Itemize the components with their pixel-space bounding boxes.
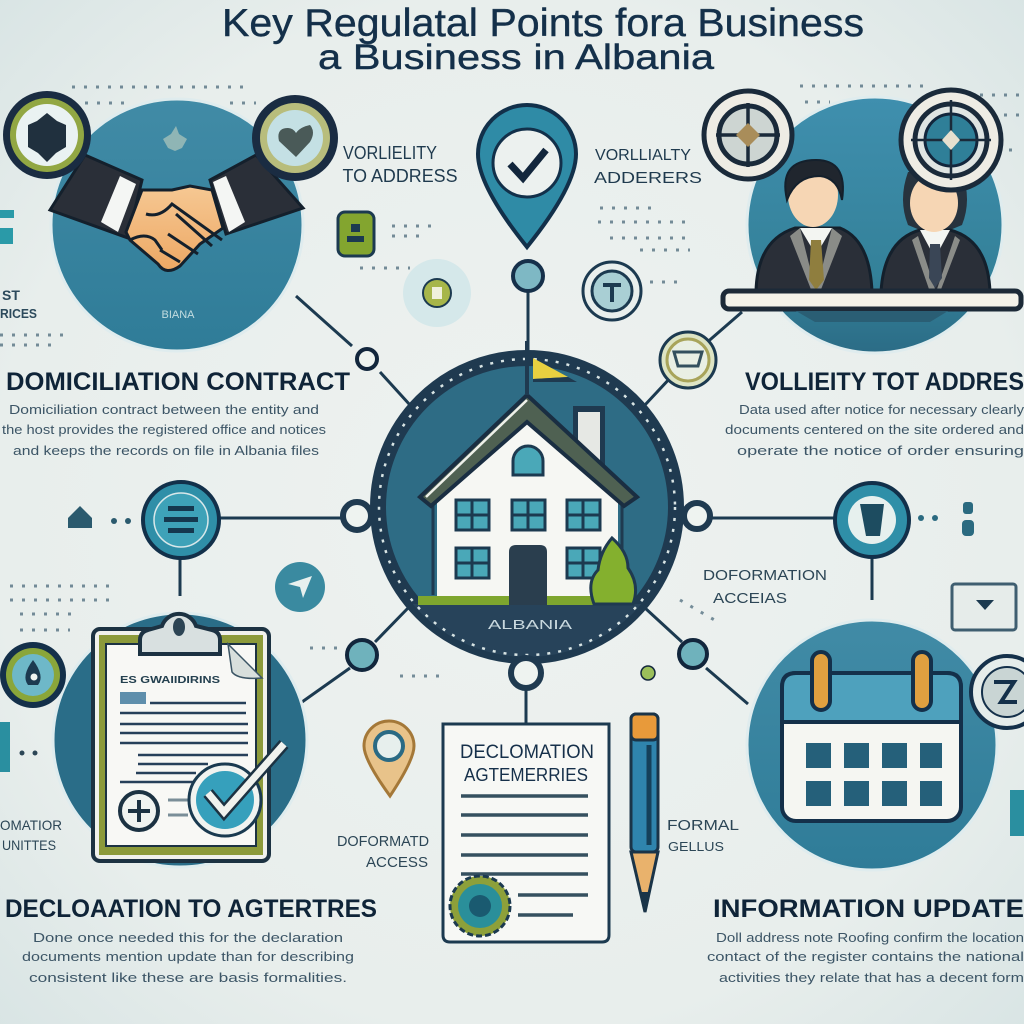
icon: pen	[631, 714, 658, 912]
label: deformated access: DOFORMATD	[337, 833, 429, 850]
heading: declaration to agreements: DECLOAATION TO AGTERTRES	[5, 895, 377, 923]
title: Key Regulatal Points fora Business	[222, 2, 864, 45]
central illustration: house in albania: ALBANIA	[488, 617, 572, 632]
caption: BIANA	[161, 309, 195, 321]
teal circle backdrop	[51, 99, 303, 351]
text: domiciliation description	[2, 402, 327, 458]
clipboard	[93, 614, 284, 861]
icon: T badge	[583, 262, 641, 320]
label: formal details	[667, 817, 739, 854]
text: declaration description: consistent like these are basis formalities.	[29, 970, 347, 985]
icon: left edge drop badge	[0, 642, 66, 708]
label: validity address right	[594, 147, 702, 187]
clipboard: ES GWAIIDIRINS	[120, 675, 220, 686]
lower band	[413, 604, 641, 656]
label: validity to address left: TO ADDRESS	[342, 166, 458, 186]
icon: document badge right	[835, 483, 909, 557]
nodes on central circle	[343, 349, 710, 688]
ground	[418, 596, 618, 605]
central illustration: house in albania	[370, 341, 690, 664]
icon: small figures right	[918, 502, 974, 536]
podium	[723, 291, 1021, 309]
icon: small nav badge	[275, 562, 325, 612]
plus badge	[120, 792, 158, 830]
label: formal details: FORMAL	[667, 817, 739, 834]
document: declaration agreements: DECLOMATION	[460, 742, 594, 763]
badge: refresh	[971, 656, 1024, 728]
text: information description: contact of the register contains the national	[707, 949, 1024, 964]
label: deformation access	[703, 567, 827, 607]
label: deformated access: ACCESS	[366, 854, 428, 871]
panel: information update illustration	[747, 620, 1024, 870]
icon: small figures left	[68, 506, 131, 528]
panel: validity of address illustration	[704, 90, 1021, 353]
woman	[881, 172, 990, 292]
badge: globe	[3, 91, 91, 179]
label: validity address right: ADDERERS	[594, 170, 702, 187]
text: information description: Doll address note Roofing confirm the location	[716, 930, 1024, 945]
check badge	[189, 764, 261, 836]
label: left edge: OMATIOR	[0, 817, 62, 833]
panel: domiciliation contract illustration	[3, 91, 338, 351]
document: declaration agreements: AGTEMERRIES	[464, 765, 588, 785]
seal	[450, 876, 510, 936]
icon: map pin bottom	[364, 721, 414, 796]
text: information description	[707, 930, 1024, 985]
node: under pin	[513, 261, 543, 291]
side tab	[1010, 790, 1024, 836]
icon: left edge list labels: ST	[2, 287, 20, 303]
text: validity description: operate the notice of order ensuring	[737, 443, 1024, 458]
document: declaration agreements	[443, 724, 609, 942]
icon: left edge list labels	[0, 210, 37, 321]
text: validity description: documents centered on the site ordered and	[725, 422, 1024, 437]
label: deformation access: DOFORMATION	[703, 567, 827, 584]
top window	[513, 446, 543, 475]
panel: declaration illustration	[53, 613, 307, 867]
title	[222, 2, 864, 77]
label: deformated access	[337, 833, 429, 871]
icon: location pin with check	[478, 105, 576, 247]
label: validity to address left	[342, 143, 458, 186]
decorative dot clusters	[0, 86, 1020, 676]
door	[509, 545, 547, 605]
house	[418, 341, 637, 605]
icon: list badge left	[143, 482, 219, 558]
windows	[456, 500, 600, 578]
handshake icon	[50, 155, 303, 271]
icon: green small badge	[338, 212, 374, 256]
text: domiciliation description: Domiciliation contract between the entity and	[9, 402, 319, 417]
text: domiciliation description: the host provides the registered office and notices	[2, 422, 327, 437]
target badge right	[901, 90, 1001, 190]
label: deformation access: ACCEIAS	[713, 590, 787, 607]
label: formal details: GELLUS	[668, 839, 724, 854]
badge: heart	[252, 95, 338, 181]
text: information description: activities they relate that has a decent form	[719, 970, 1024, 985]
heading: information update: INFORMATION UPDATE	[713, 895, 1024, 923]
label: validity address right: VORLLIALTY	[595, 147, 691, 164]
man	[756, 160, 872, 292]
heading: domiciliation contract: DOMICILIATION CONTRACT	[6, 368, 350, 396]
text: validity description	[725, 402, 1024, 458]
icon: glowing coin	[403, 259, 471, 327]
connector lines	[180, 292, 872, 725]
text: domiciliation description: and keeps the records on file in Albania files	[13, 443, 320, 458]
label: left edge: UNITTES	[2, 837, 56, 853]
icon: left edge list labels: RICES	[0, 306, 37, 321]
text: declaration description: Done once needed this for the declaration	[33, 930, 343, 945]
icon: small laptop badge top right of house	[660, 332, 716, 388]
text: declaration description	[22, 930, 354, 985]
text: declaration description: documents mention update than for describing	[22, 949, 354, 964]
target badge left	[704, 91, 792, 179]
label: validity to address left: VORLIELITY	[343, 143, 437, 163]
calendar	[782, 652, 961, 821]
emblem	[163, 126, 187, 151]
label: left edge	[0, 722, 62, 853]
shrub	[591, 538, 636, 604]
icon: folder card right	[952, 584, 1016, 630]
text: validity description: Data used after notice for necessary clearly	[739, 402, 1024, 417]
title: a Business in Albania	[318, 38, 715, 77]
